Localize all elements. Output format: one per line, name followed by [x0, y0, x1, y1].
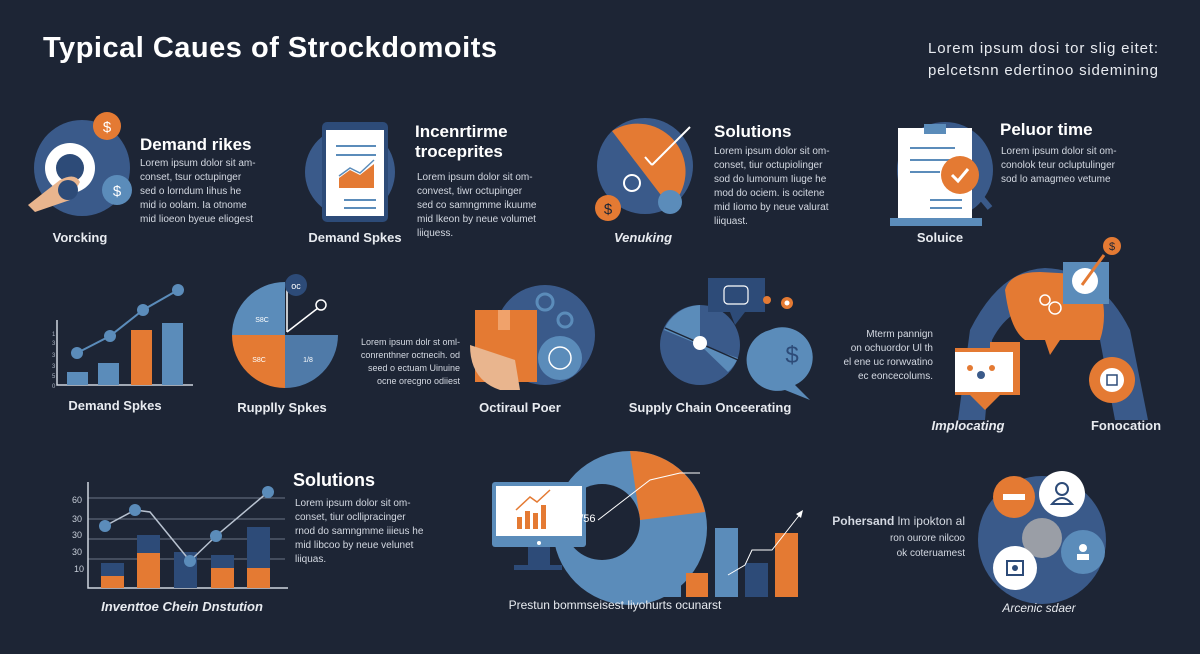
text block mid-right: Mterm pannign	[866, 329, 933, 340]
panel: solutions top	[595, 118, 830, 245]
text block mid-left	[361, 337, 460, 386]
text block: conset, tiur octupiolinger	[714, 160, 823, 171]
text block: mid lioeon byeue eliogest	[140, 214, 253, 225]
text block mid-left: Lorem ipsum dolr st oml-	[361, 337, 460, 347]
bar chart: demand spikes: 5	[52, 374, 56, 380]
text block	[417, 172, 537, 239]
icon cluster: implocating: $	[1109, 241, 1115, 253]
text block mid-right: ec eoncecolums.	[858, 371, 933, 382]
text block: liiquast.	[714, 216, 748, 227]
icon: hand with box	[470, 285, 595, 415]
labels	[932, 418, 1161, 433]
text block: mid Iiomo by neue valurat	[714, 202, 829, 213]
icon cluster: implocating	[932, 237, 1161, 433]
icon: clipboard	[890, 122, 993, 226]
donut + monitor + bars: 12/56	[568, 513, 596, 525]
text block bottom-right	[832, 514, 965, 559]
label: Demand Spkes	[308, 230, 402, 245]
heading: Peluor time	[1000, 120, 1093, 139]
panel: demand rikes	[28, 112, 256, 245]
title: Typical Caues of Strockdomoits	[43, 32, 497, 64]
panel: peluor time	[890, 120, 1117, 245]
text block mid-right: on ochuordor Ul th	[851, 343, 933, 354]
text block: mid libcoo by neue velunet	[295, 540, 414, 551]
pie chart: supply spikes: S8C	[252, 357, 266, 364]
pie chart: supply spikes: oc	[291, 281, 301, 291]
text block: rnod do samngmme iiieus he	[295, 526, 424, 537]
text block: Lorem ipsum dolor sit om-	[417, 172, 533, 183]
text block: liiquess.	[417, 228, 453, 239]
text block mid-right: el ene uc rorwvatino	[844, 357, 933, 368]
text block bottom-right: ron ourore nilcoo	[890, 533, 965, 544]
label: Octiraul Poer	[479, 400, 561, 415]
text block: conset, tsur octupinger	[140, 172, 242, 183]
label: Venuking	[614, 230, 672, 245]
subtitle	[928, 40, 1158, 79]
text block	[714, 146, 830, 227]
text block: Lorem ipsum dolor sit om-	[1001, 146, 1117, 157]
bar chart: inventory	[72, 482, 288, 614]
text block mid-left: conrenthner octnecih. od	[361, 350, 460, 360]
text block mid-left: seed o ectuam Uinuine	[368, 363, 460, 373]
bar chart: inventory: 30	[72, 530, 82, 540]
text block: mid io oolam. Ia otnome	[140, 200, 247, 211]
labels: Fonocation	[1091, 418, 1161, 433]
labels: Implocating	[932, 418, 1005, 433]
icon cluster: people	[978, 471, 1106, 615]
heading: troceprites	[415, 142, 503, 161]
heading: Solutions	[714, 122, 791, 141]
text block: sed o lorndum Iihus he	[140, 186, 242, 197]
heading: Incenrtirme	[415, 122, 508, 141]
label: Demand Spkes	[68, 398, 162, 413]
label: Arcenic sdaer	[1001, 601, 1077, 615]
text block bottom-right: Pohersand lm ipokton al	[832, 514, 965, 528]
text block	[295, 498, 424, 565]
icon: tablet	[305, 122, 395, 222]
label: Soluice	[917, 230, 963, 245]
icon: hand gear: $	[113, 183, 122, 200]
icon: split circle: $	[604, 201, 613, 218]
text block: Lorem ipsum dolor sit om-	[714, 146, 830, 157]
icon: hand gear: $	[103, 119, 112, 136]
text block: conolok teur ocluptulinger	[1001, 160, 1116, 171]
bar chart: demand spikes: 1	[52, 332, 56, 338]
panel: incentirme	[305, 122, 537, 245]
pie chart: supply spikes: S8C	[255, 317, 269, 324]
icon: supply chain: $	[785, 342, 799, 369]
text block mid-right	[844, 329, 933, 382]
bar chart: inventory: 30	[72, 547, 82, 557]
subtitle: pelcetsnn edertinoo sidemining	[928, 62, 1158, 79]
bar chart: inventory: 10	[74, 564, 84, 574]
label: Vorcking	[53, 230, 107, 245]
icon: supply chain	[629, 278, 813, 415]
label: Supply Chain Onceerating	[629, 400, 791, 415]
subtitle: Lorem ipsum dosi tor slig eitet:	[928, 40, 1158, 57]
bar chart: demand spikes: 3	[52, 364, 56, 370]
bar chart: inventory: 30	[72, 514, 82, 524]
donut + monitor + bars	[492, 451, 803, 612]
bar chart: inventory: 60	[72, 495, 82, 505]
text block	[140, 158, 256, 225]
text block bottom-right: ok coteruamest	[897, 548, 965, 559]
text block: convest, tiwr octupinger	[417, 186, 523, 197]
text block: Lorem ipsum dolor sit am-	[140, 158, 256, 169]
icon: hand gear	[28, 112, 132, 216]
label: Rupplly Spkes	[237, 400, 327, 415]
label: Inventtoe Chein Dnstution	[101, 599, 263, 614]
text block: mid lkeon by neue volumet	[417, 214, 536, 225]
bar chart: demand spikes: 0	[52, 384, 56, 390]
text block: sed co samngmme ikuume	[417, 200, 537, 211]
pie chart: supply spikes: 1/8	[303, 357, 313, 364]
heading: Demand rikes	[140, 135, 252, 154]
heading: solutions bottom: Solutions	[293, 470, 375, 490]
text block: sod lo amagmeo vetume	[1001, 174, 1111, 185]
text block: Lorem ipsum dolor sit om-	[295, 498, 411, 509]
text block mid-left: ocne orecgno odiiest	[377, 376, 460, 386]
heading	[415, 122, 508, 161]
text block: liiquas.	[295, 554, 326, 565]
bar chart: demand spikes: 3	[52, 341, 56, 347]
text block: conset, tiur ocllipracinger	[295, 512, 406, 523]
icon: split circle	[595, 118, 693, 221]
text block: sod do lumonum Iiuge he	[714, 174, 827, 185]
pie chart: supply spikes	[232, 274, 338, 415]
text block: mod do ociem. is ocitene	[714, 188, 825, 199]
bar chart: demand spikes	[52, 284, 193, 413]
text block	[1001, 146, 1117, 185]
caption: Prestun bommseisest liyohurts ocunarst	[509, 598, 722, 612]
bar chart: demand spikes: 3	[52, 353, 56, 359]
